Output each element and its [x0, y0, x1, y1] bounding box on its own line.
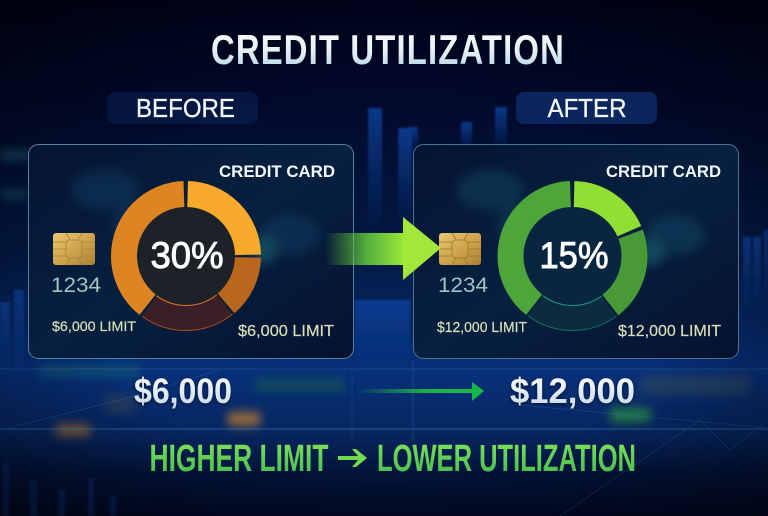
- label: before: BEFORE: [136, 93, 235, 123]
- limit label left: $6,000 LIMIT: [52, 318, 136, 334]
- credit card heading: CREDIT CARD: [219, 162, 335, 181]
- takeaway: [150, 438, 636, 480]
- value: before limit: $6,000: [134, 372, 232, 411]
- panel: after card: [414, 144, 738, 358]
- title: CREDIT UTILIZATION: [211, 26, 565, 73]
- decorative world map: [71, 170, 320, 264]
- donut value: 15%: [540, 235, 608, 276]
- takeaway: HIGHER LIMIT: [150, 438, 328, 480]
- arrow: before to after: [325, 217, 441, 280]
- card number: 1234: [438, 274, 488, 297]
- value: after limit: $12,000: [510, 372, 635, 411]
- card number: 1234: [51, 274, 101, 297]
- panel: before card: [28, 144, 354, 358]
- decorative world map: [456, 170, 705, 266]
- takeaway: LOWER UTILIZATION: [377, 438, 636, 480]
- donut chart: 15%: [498, 182, 647, 330]
- arrow: limit increase: [355, 382, 484, 401]
- label: after: [516, 92, 657, 124]
- limit label right: $12,000 LIMIT: [618, 323, 722, 340]
- donut chart: 30%: [112, 182, 260, 330]
- label: after: AFTER: [548, 93, 626, 123]
- label: before: [107, 92, 258, 124]
- limit label left: $12,000 LIMIT: [437, 320, 527, 336]
- icon: takeaway arrow: [338, 449, 367, 467]
- icon: chip: [53, 233, 95, 265]
- icon: chip: [439, 233, 481, 265]
- limit label right: $6,000 LIMIT: [238, 323, 335, 340]
- donut value: 30%: [150, 235, 224, 276]
- credit card heading: CREDIT CARD: [606, 162, 721, 181]
